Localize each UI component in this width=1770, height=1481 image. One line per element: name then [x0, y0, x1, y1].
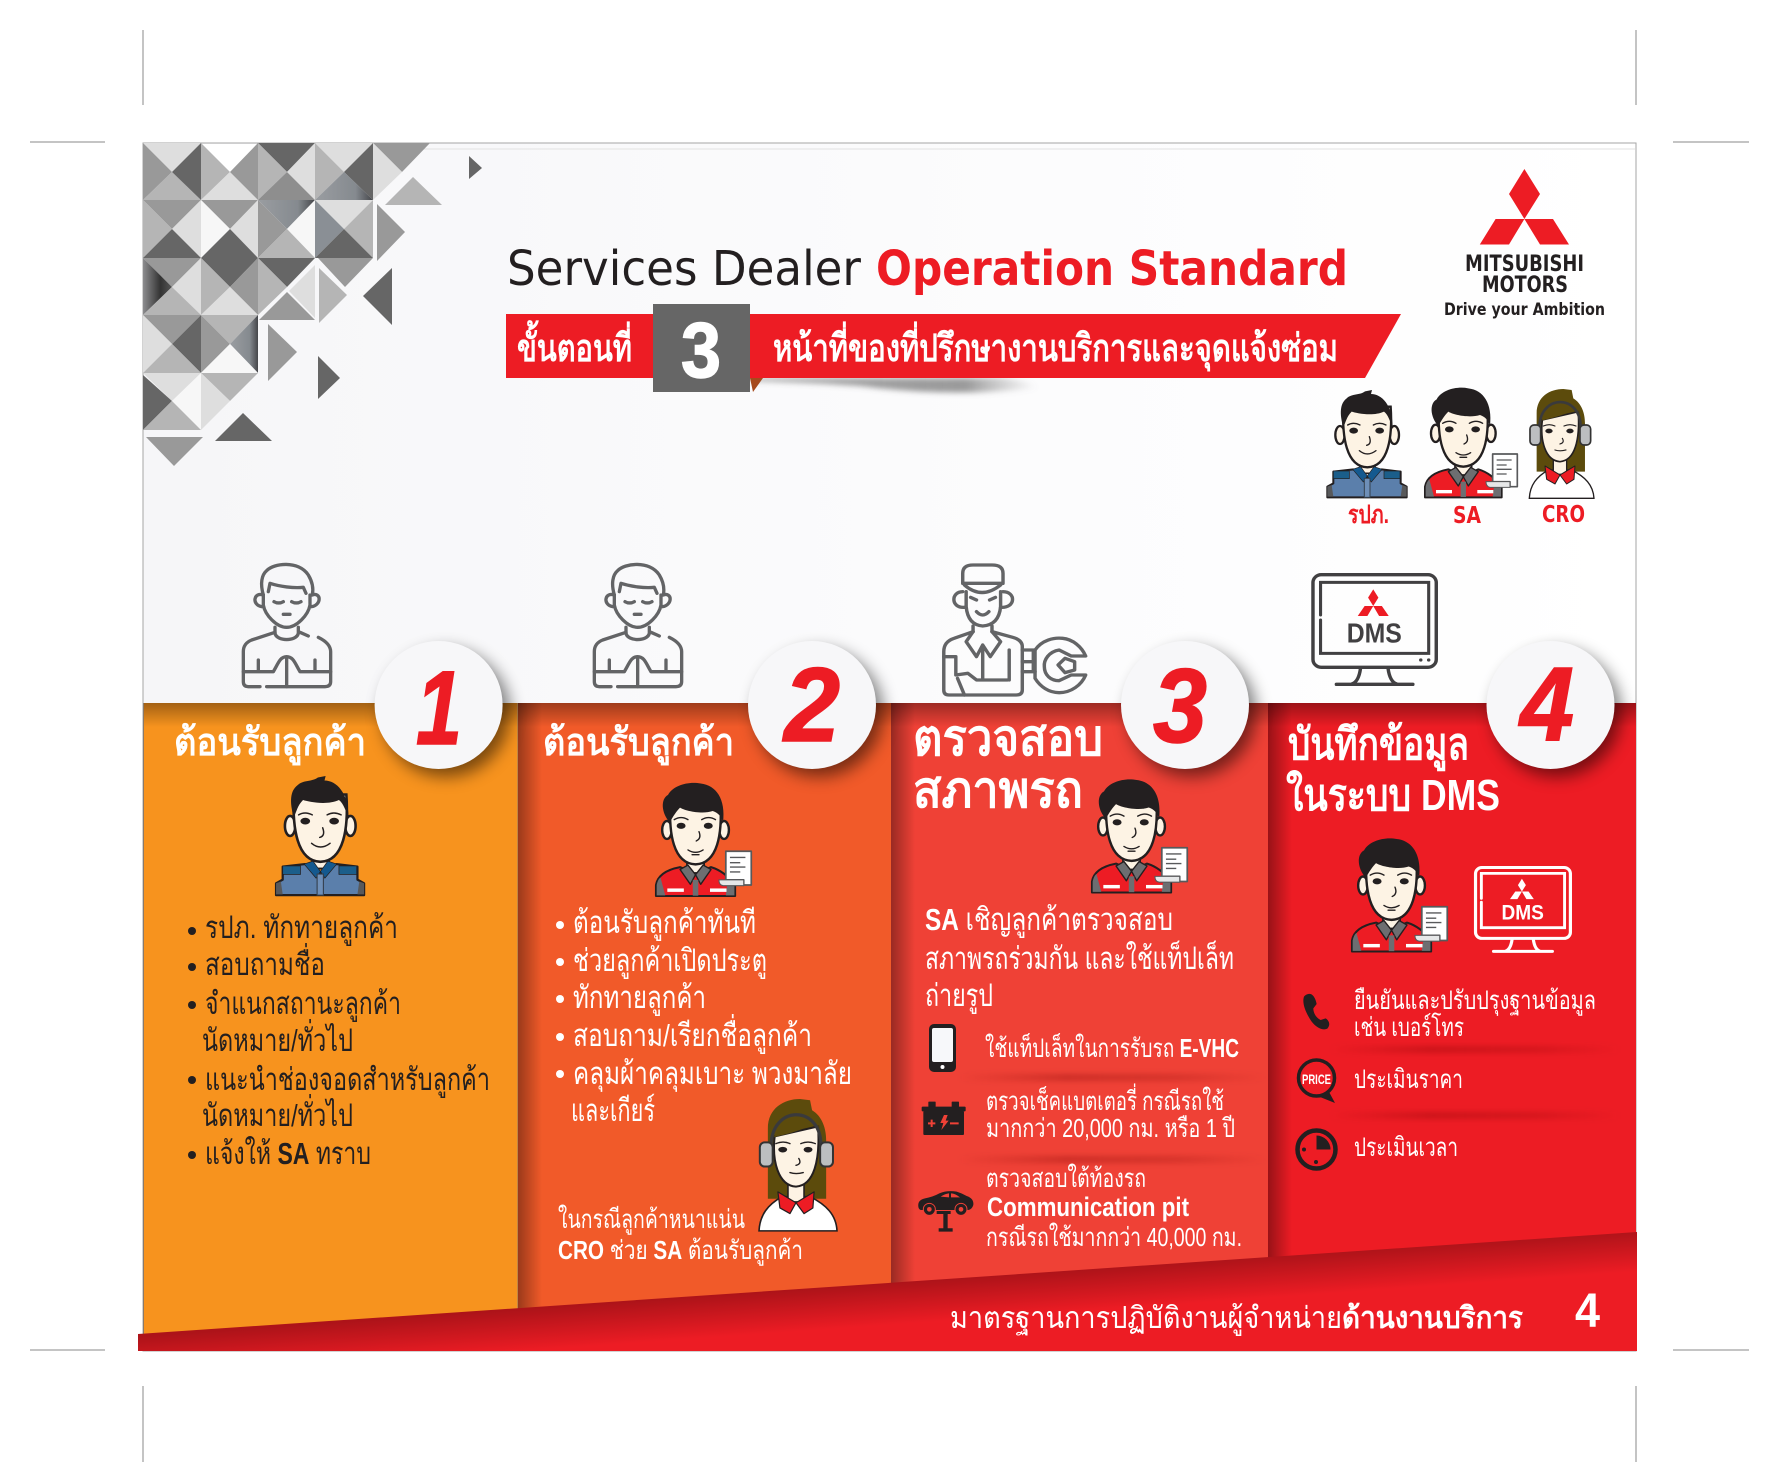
icon: white DMS monitor: DMS: [1501, 900, 1544, 924]
staff legend: CRO: [1542, 502, 1585, 528]
icon: tablet: [929, 1024, 956, 1072]
panel: step 1 column: [143, 703, 518, 1343]
panel: step 2 column: [518, 703, 891, 1343]
heading: step 4: [1286, 720, 1500, 820]
footer text: มาตรฐานการปฏิบัติงานผู้จำหน่าย: [950, 1302, 1342, 1336]
footer wedge: ด้านงานบริการ: [1342, 1302, 1523, 1335]
panel: step 3 column: [891, 703, 1268, 1343]
bullet list: step 2: สอบถาม/เรียกชื่อลูกค้า: [573, 1014, 812, 1054]
mitsubishi motors logo: MOTORS: [1482, 273, 1568, 298]
description: สภาพรถร่วมกัน และใช้แท็ปเล็ท: [925, 940, 1234, 976]
icon: battery: [922, 1102, 966, 1135]
bullet list: step 1: [188, 910, 490, 1171]
SA character: [656, 783, 751, 896]
CRO note: CRO ช่วย SA ต้อนรับลูกค้า: [558, 1235, 803, 1266]
CRO character: [759, 1099, 837, 1231]
underbody inspection text: กรณีรถใช้มากกว่า 40,000 กม.: [986, 1222, 1242, 1252]
bullet list: step 2: และเกียร์: [571, 1093, 655, 1128]
title: [507, 241, 1348, 297]
mitsubishi motors logo: MITSUBISHI: [1465, 252, 1584, 277]
underbody inspection text: [986, 1163, 1242, 1252]
bullet list: step 1: แนะนำช่องจอดสำหรับลูกค้า: [205, 1062, 490, 1098]
icon: telephone: [1303, 994, 1329, 1029]
icon: mechanic with wrench: [944, 565, 1086, 695]
icon: greeting person 2: [594, 564, 682, 687]
number badge 2: [748, 641, 883, 777]
step banner: 3: [681, 306, 721, 394]
guard character: [276, 776, 364, 895]
icon: DMS monitor: DMS: [1347, 618, 1402, 650]
data text: เช่น เบอร์โทร: [1354, 1012, 1464, 1042]
step banner: [506, 304, 1401, 394]
bullet list: step 2: ช่วยลูกค้าเปิดประตู: [573, 943, 767, 979]
time text: ประเมินเวลา: [1354, 1132, 1458, 1162]
bullet list: step 1: นัดหมาย/ทั่วไป: [202, 1019, 353, 1058]
icon: price bubble: PRICE: [1302, 1071, 1331, 1087]
underbody inspection text: ตรวจสอบใต้ท้องรถ: [986, 1163, 1146, 1193]
icon: DMS monitor: [1313, 575, 1436, 684]
number badge 3: [1121, 641, 1256, 777]
heading: step 3: สภาพรถ: [913, 762, 1083, 818]
footer wedge: [138, 1232, 1637, 1351]
page number: 4: [1575, 1285, 1600, 1338]
number badge 1: 1: [416, 650, 462, 767]
number badge 1: [375, 641, 510, 777]
mitsubishi motors logo: Drive your Ambition: [1444, 300, 1605, 319]
icon: price bubble: [1298, 1060, 1335, 1103]
staff legend: SA: [1453, 503, 1481, 529]
staff legend: รปภ.: [1348, 501, 1389, 529]
heading: step 4: บันทึกข้อมูล: [1288, 720, 1469, 771]
title: Operation Standard: [876, 241, 1348, 297]
bullet list: step 1: แจ้งให้ SA ทราบ: [205, 1136, 371, 1171]
battery text: [986, 1083, 1235, 1143]
mitsubishi motors logo: [1444, 169, 1605, 319]
bullet list: step 2: ทักทายลูกค้า: [573, 980, 706, 1016]
underbody inspection text: Communication pit: [987, 1192, 1189, 1222]
E-VHC text: ใช้แท็ปเล็ทในการรับรถ E-VHC: [985, 1032, 1239, 1063]
number badge 3: 3: [1153, 648, 1207, 765]
number badge 4: [1486, 641, 1621, 777]
battery text: มากกว่า 20,000 กม. หรือ 1 ปี: [986, 1113, 1235, 1143]
data text: [1354, 985, 1596, 1042]
description: [925, 902, 1234, 1014]
price text: ประเมินราคา: [1354, 1064, 1463, 1094]
bullet list: step 1: รปภ. ทักทายลูกค้า: [205, 910, 398, 946]
CRO note: ในกรณีลูกค้าหนาแน่น: [558, 1204, 745, 1235]
step banner: หน้าที่ของที่ปรึกษางานบริการและจุดแจ้งซ่อม: [773, 321, 1338, 372]
bullet list: step 2: คลุมผ้าคลุมเบาะ พวงมาลัย: [573, 1056, 852, 1093]
icon: white DMS monitor: [1476, 868, 1570, 951]
SA character: [1352, 838, 1447, 952]
geometric triangle pattern: [143, 143, 482, 466]
icon: greeting person 1: [243, 564, 331, 687]
bullet list: step 2: ต้อนรับลูกค้าทันที: [573, 905, 756, 941]
SA character: [1092, 779, 1187, 893]
heading: step 3: [913, 710, 1103, 818]
heading: step 2: ต้อนรับลูกค้า: [543, 722, 734, 766]
bullet list: step 2: [556, 905, 852, 1128]
step banner: ขั้นตอนที่: [517, 320, 632, 370]
page background panel: [143, 143, 1636, 1351]
heading: step 4: ในระบบ DMS: [1286, 769, 1500, 820]
bullet list: step 1: นัดหมาย/ทั่วไป: [202, 1094, 353, 1133]
staff legend: [1327, 388, 1594, 529]
description: ถ่ายรูป: [925, 978, 993, 1014]
battery text: ตรวจเช็คแบตเตอรี่ กรณีรถใช้: [986, 1083, 1224, 1116]
number badge 2: 2: [782, 647, 840, 764]
data text: ยืนยันและปรับปรุงฐานข้อมูล: [1354, 985, 1596, 1016]
CRO note: [558, 1204, 803, 1266]
panel: step 4 column: [1268, 703, 1636, 1303]
bullet list: step 1: สอบถามชื่อ: [205, 943, 325, 982]
heading: step 1: ต้อนรับลูกค้า: [174, 722, 366, 766]
icon: clock: [1298, 1130, 1336, 1168]
icon: car on lift: [918, 1191, 973, 1232]
number badge 4: 4: [1518, 646, 1574, 763]
heading: step 3: ตรวจสอบ: [913, 710, 1103, 766]
description: SA เชิญลูกค้าตรวจสอบ: [925, 902, 1173, 938]
title: Services Dealer: [507, 241, 861, 297]
bullet list: step 1: จำแนกสถานะลูกค้า: [205, 986, 401, 1022]
